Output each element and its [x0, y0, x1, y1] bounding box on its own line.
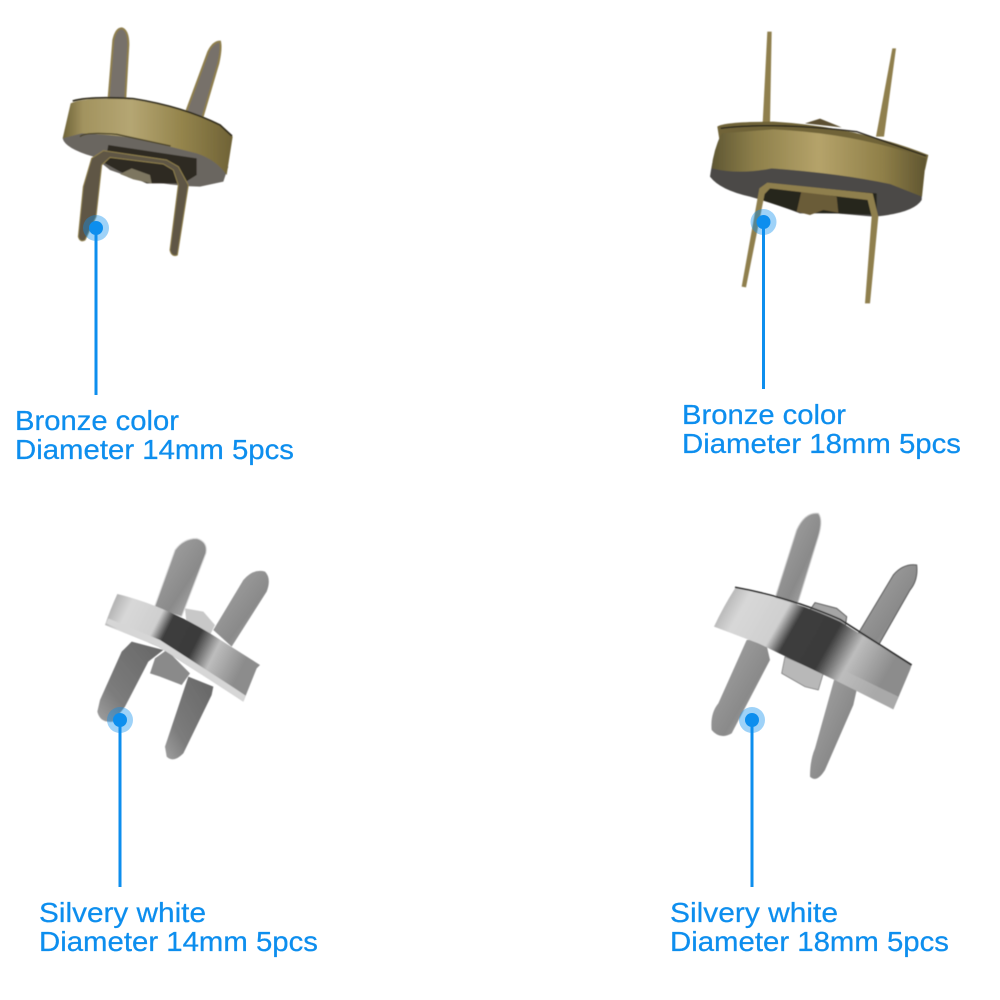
label: silvery 18mm: Silvery white: [670, 897, 838, 928]
callout marker: silvery 18mm: [739, 707, 765, 887]
callout marker: bronze 18mm: [750, 209, 776, 389]
clasp: silvery 18mm: [711, 513, 917, 779]
label: silvery 18mm: Diameter 18mm 5pcs: [670, 926, 949, 957]
clasp: bronze 18mm: [710, 32, 928, 303]
label: silvery 14mm: Silvery white: [39, 897, 206, 928]
label: silvery 14mm: Diameter 14mm 5pcs: [39, 926, 318, 957]
label: silvery 18mm: [670, 897, 949, 957]
label: bronze 14mm: Bronze color: [15, 405, 179, 436]
label: bronze 18mm: Diameter 18mm 5pcs: [682, 428, 961, 459]
clasp: silvery 14mm: [97, 538, 269, 759]
label: bronze 18mm: [682, 399, 961, 459]
label: silvery 14mm: [39, 897, 318, 957]
label: bronze 14mm: Diameter 14mm 5pcs: [15, 434, 294, 465]
label: bronze 18mm: Bronze color: [682, 399, 846, 430]
callout marker: bronze 14mm: [83, 215, 109, 395]
label: bronze 14mm: [15, 405, 294, 465]
callout marker: silvery 14mm: [107, 707, 133, 887]
clasp: bronze 14mm: [63, 28, 233, 256]
